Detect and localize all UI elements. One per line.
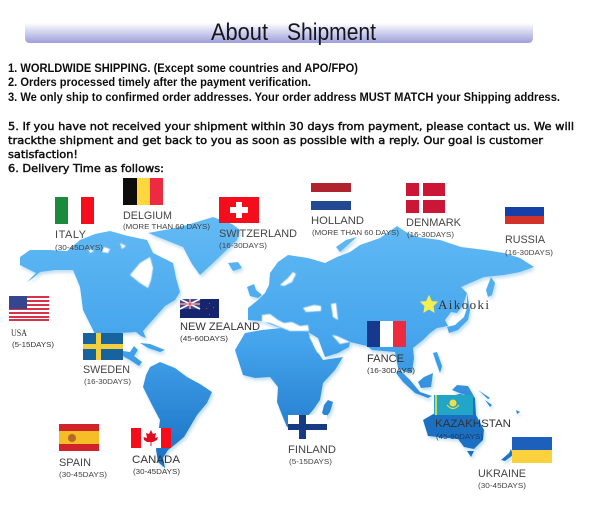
contact and delivery notes: 6. Delivery Time as follows: (8, 162, 164, 175)
flag and label: Delgium: (MORE THAN 60 DAYS) (123, 222, 211, 231)
contact and delivery notes: satisfaction! (8, 148, 78, 161)
flag and label: Switzerland: (16-30DAYS) (219, 241, 268, 250)
flag and label: Spain (59, 424, 108, 479)
flag and label: Ukraine: UKRAINE (478, 468, 526, 480)
flag and label: Canada: CANADA (132, 454, 181, 466)
flag and label: Denmark (406, 183, 462, 239)
shipping notes: 1. WORLDWIDE SHIPPING. (Except some countries and APO/FPO) (8, 63, 358, 75)
flag and label: New Zealand: NEW ZEALAND (180, 321, 260, 333)
flag and label: Russia: (16-30DAYS) (505, 248, 554, 257)
flag and label: Kazakhstan: (45-60DAYS) (436, 432, 484, 441)
flag and label: USA: (5-15DAYS) (12, 340, 55, 349)
shipping notes: 2. Orders processed timely after the payment verification. (8, 77, 311, 89)
flag and label: Spain: (30-45DAYS) (59, 470, 108, 479)
title: About (211, 19, 268, 46)
flag and label: USA (9, 296, 55, 349)
flag and label: Sweden: SWEDEN (83, 364, 130, 376)
flag and label: Ukraine: (30-45DAYS) (478, 481, 527, 490)
flag and label: Canada (131, 428, 181, 476)
Australia (423, 394, 484, 457)
flag and label: Kazakhstan (434, 395, 511, 441)
flag and label: Finland (288, 415, 336, 466)
flag and label: Denmark: (16-30DAYS) (407, 230, 455, 239)
flag and label: Italy (55, 197, 104, 252)
contact and delivery notes: 5. If you have not received your shipment within 30 days from payment, please contact us. We will (8, 120, 574, 133)
flag and label: Holland: HOLLAND (311, 215, 364, 227)
flag and label: Spain: SPAIN (59, 457, 91, 469)
flag and label: Delgium (123, 178, 211, 231)
flag and label: Switzerland: SWITZERLAND (219, 228, 297, 240)
title: Shipment (287, 19, 376, 46)
flag and label: Kazakhstan: KAZAKHSTAN (435, 418, 511, 430)
flag and label: New Zealand: (45-60DAYS) (180, 334, 229, 343)
flag and label: Switzerland (219, 197, 297, 250)
flag and label: Holland: (MORE THAN 60 DAYS) (312, 228, 400, 237)
shipping notes: 3. We only ship to confirmed order addresses. Your order address MUST MATCH your Shipping address. (8, 92, 560, 104)
title (211, 19, 376, 46)
flag and label: Denmark: DENMARK (406, 217, 462, 229)
flag and label: Delgium: DELGIUM (123, 210, 172, 222)
world map (20, 217, 534, 468)
flag and label: New Zealand (180, 299, 260, 343)
flag and label: Ukraine (478, 437, 552, 490)
flag and label: France: FANCE (367, 353, 404, 365)
flag and label: Sweden (83, 333, 132, 386)
flag and label: France: (16-30DAYS) (367, 366, 416, 375)
Aikooki marker: Aikooki (438, 297, 489, 312)
flag and label: Finland: FINLAND (288, 444, 336, 456)
title banner (25, 19, 533, 46)
flag and label: Italy: ITALY (55, 229, 87, 241)
flag and label: Sweden: (16-30DAYS) (84, 377, 132, 386)
flag and label: Russia (505, 207, 554, 257)
flag and label: USA: USA (11, 328, 27, 338)
flag and label: France (367, 321, 416, 375)
flag and label: Finland: (5-15DAYS) (289, 457, 333, 466)
flag and label: Holland (311, 183, 400, 237)
flag and label: Canada: (30-45DAYS) (133, 467, 181, 476)
Aikooki marker (421, 296, 489, 312)
inland seas (88, 243, 350, 354)
contact and delivery notes: trackthe shipment and get back to you as soon as possible with a reply. Our goal is customer (8, 134, 543, 147)
flag and label: Russia: RUSSIA (505, 234, 546, 246)
flag and label: Italy: (30-45DAYS) (55, 243, 104, 252)
shipping notes (8, 63, 560, 104)
contact and delivery notes (8, 120, 574, 175)
